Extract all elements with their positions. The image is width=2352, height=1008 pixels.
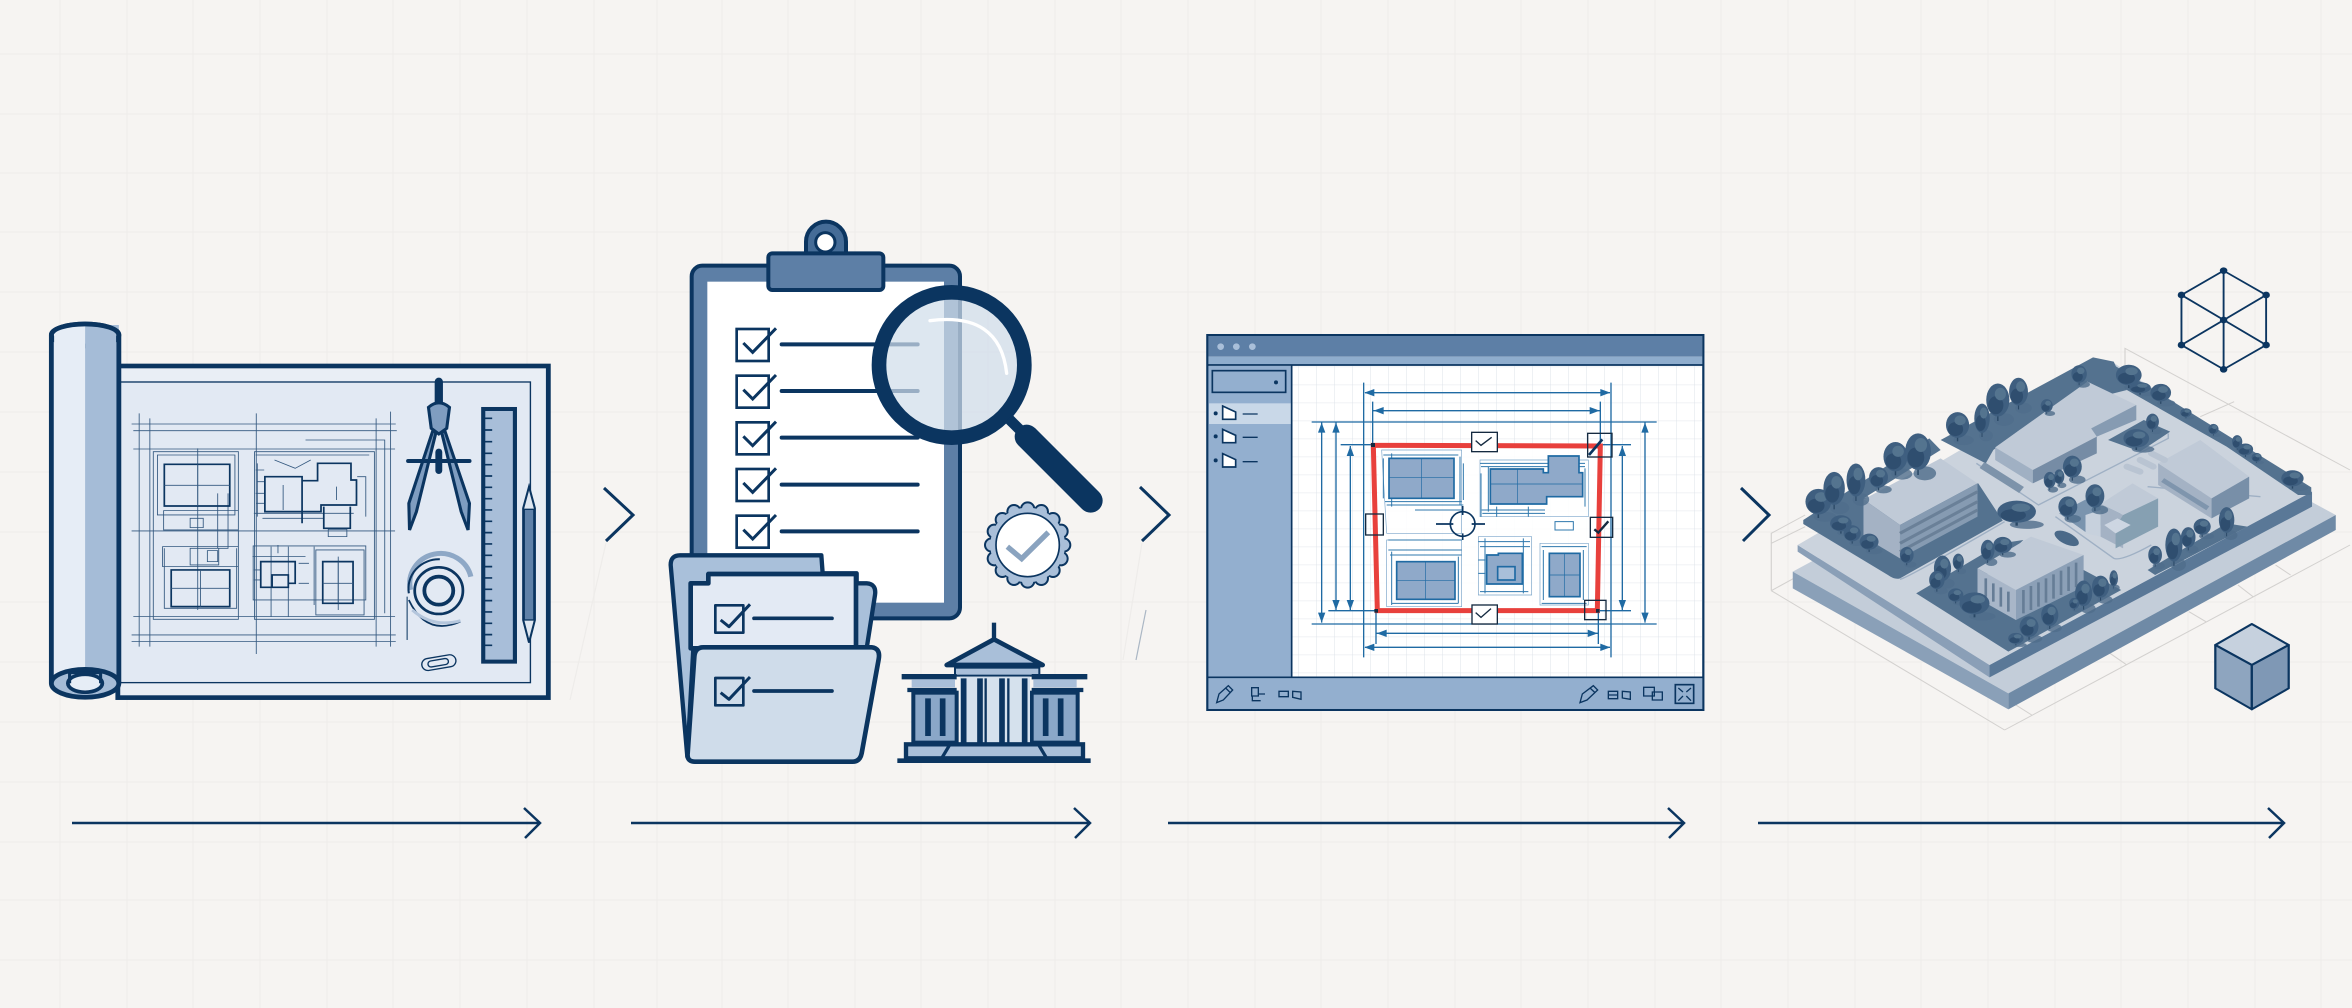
- icon: paper clip: [421, 654, 457, 671]
- icon: approval seal: [985, 502, 1070, 588]
- panel: CAD software window: [1207, 335, 1703, 710]
- folder with documents: [671, 555, 879, 762]
- arrow: step 1: [72, 808, 540, 838]
- arrow: step 2: [631, 808, 1090, 838]
- clipboard board: [692, 222, 960, 618]
- arrow: step 3 to 4 chevron: [1741, 488, 1769, 541]
- panel: 3D isometric site model: [1771, 267, 2350, 730]
- trees: [1805, 365, 2308, 647]
- icon: magnifying glass: [879, 292, 1091, 501]
- roll cylinder: [51, 324, 119, 697]
- selection handles: [1366, 432, 1613, 624]
- timeline arrows: [72, 808, 2284, 838]
- arrow: step 1 to 2 chevron: [604, 488, 633, 541]
- sidebar: [1207, 365, 1703, 677]
- icon: wireframe cube: [2178, 267, 2270, 373]
- icon: government building: [897, 623, 1091, 761]
- window frame: [1207, 335, 1703, 710]
- gardens and paths: [1803, 357, 2311, 652]
- site plan buildings: [1378, 448, 1598, 608]
- bottom toolbar: [1207, 335, 1703, 710]
- dimension lines: [1312, 383, 1657, 657]
- crosshair: [1436, 506, 1485, 540]
- icon: tape roll: [407, 553, 471, 640]
- panel: review clipboard: [671, 222, 1091, 762]
- blueprint sheet: [118, 366, 548, 698]
- arrow: step 2 to 3 chevron: [1140, 487, 1169, 541]
- wireframe ground guides: [1771, 348, 2350, 730]
- icon: ruler: [483, 409, 515, 662]
- arrow: step 4: [1758, 808, 2284, 838]
- icon: pencil: [523, 487, 535, 643]
- red boundary selection: [1373, 445, 1600, 611]
- buildings: [1863, 382, 2249, 620]
- panel: blueprint roll: [51, 324, 548, 698]
- checklist: [737, 328, 918, 548]
- icon: solid cube: [2215, 624, 2289, 709]
- icon: drafting compass: [408, 382, 469, 530]
- arrow: step 3: [1168, 808, 1684, 838]
- base slabs: [1793, 362, 2336, 709]
- floor plan drawing: [132, 412, 397, 654]
